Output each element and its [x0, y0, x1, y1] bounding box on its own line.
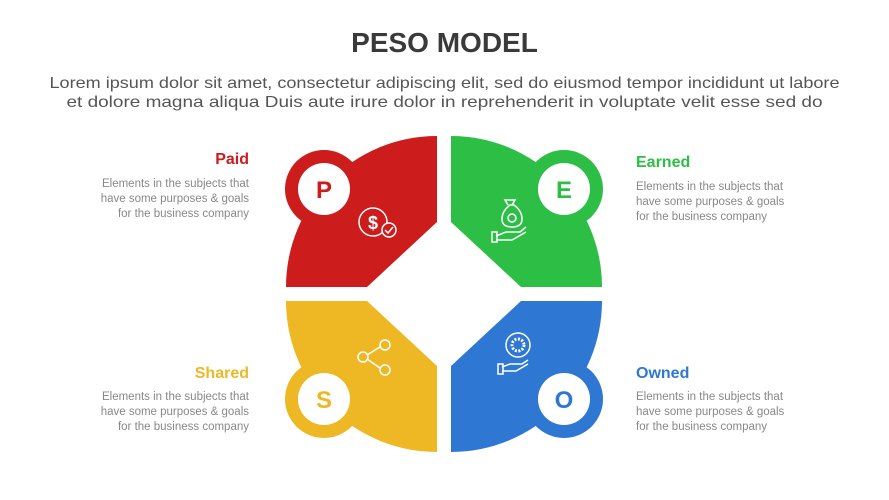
text block: paid: Elements in the subjects that	[102, 178, 250, 190]
text block: shared: Elements in the subjects that	[102, 391, 250, 403]
icon: share	[358, 340, 390, 375]
text block: paid: Paid	[215, 151, 249, 168]
text block: earned	[636, 154, 785, 223]
text block: paid: for the business company	[118, 208, 249, 220]
text block: shared: for the business company	[118, 421, 249, 433]
panel: earned quadrant: E	[556, 177, 572, 204]
text block: shared: Shared	[195, 365, 249, 382]
icon: money bag in hand	[492, 200, 526, 242]
text block: owned: Elements in the subjects that	[636, 391, 784, 403]
text block: earned: Elements in the subjects that	[636, 181, 784, 193]
text block: owned	[636, 365, 785, 433]
text block: paid	[101, 151, 250, 220]
text block: owned: Owned	[636, 365, 689, 382]
text block: earned: have some purposes & goals	[636, 196, 785, 208]
panel: paid quadrant: P	[316, 177, 332, 204]
title: PESO MODEL	[351, 27, 538, 58]
panel: shared quadrant: S	[316, 387, 332, 414]
panel: owned quadrant: O	[555, 387, 573, 414]
text block: paid: have some purposes & goals	[101, 193, 249, 205]
panel: shared quadrant	[285, 301, 437, 452]
text block: earned: Earned	[636, 154, 690, 171]
subtitle: et dolore magna aliqua Duis aute irure dolor in reprehenderit in voluptate velit esse sed do	[66, 94, 823, 111]
panel: earned quadrant	[451, 136, 603, 287]
icon: dollar check: $	[368, 213, 378, 233]
text block: owned: have some purposes & goals	[636, 406, 785, 418]
panel: owned quadrant	[451, 301, 603, 452]
subtitle	[50, 75, 840, 111]
text block: earned: for the business company	[636, 211, 767, 223]
subtitle: Lorem ipsum dolor sit amet, consectetur adipiscing elit, sed do eiusmod tempor incididunt ut labore	[50, 75, 840, 92]
text block: owned: for the business company	[636, 421, 767, 433]
text block: shared	[101, 365, 250, 433]
icon: dollar check	[359, 208, 396, 237]
panel: paid quadrant	[285, 136, 437, 287]
icon: gear in hand	[498, 333, 530, 374]
text block: shared: have some purposes & goals	[101, 406, 249, 418]
